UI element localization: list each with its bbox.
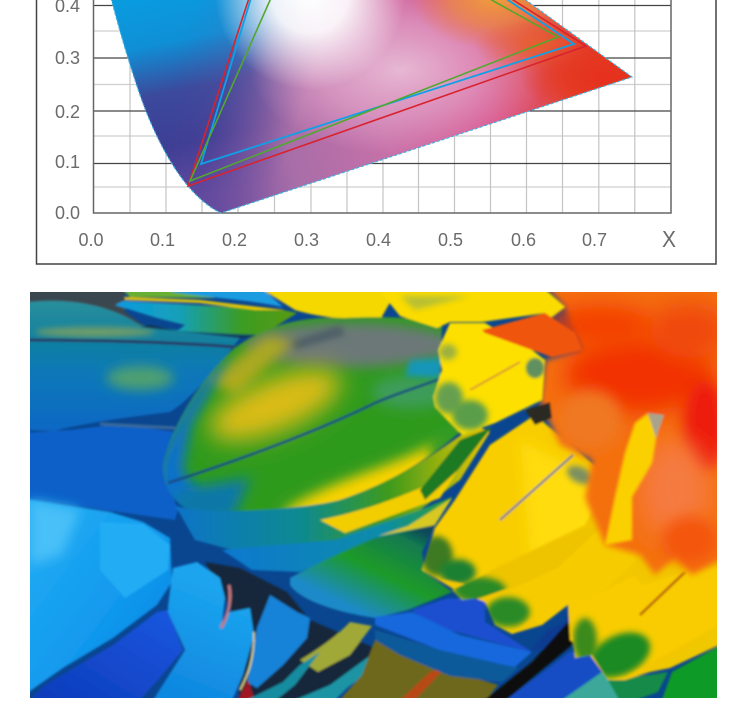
deep blue feather — [25, 610, 183, 705]
gamut outline — [111, 0, 632, 213]
chart frame — [36, 0, 716, 264]
pink quill — [221, 585, 230, 628]
x axis title: X — [662, 226, 676, 252]
upper yellow feather with green tips — [433, 323, 552, 435]
x axis labels: 0.1 — [150, 230, 175, 250]
yellow fan underlayer — [422, 415, 730, 680]
dark shadow under top feathers — [140, 325, 262, 338]
top green strip — [123, 292, 215, 300]
olive and teal lower feathers — [237, 622, 498, 705]
upper left teal-blue feather — [20, 301, 240, 431]
right side orange feathers — [536, 292, 717, 578]
photo base — [30, 292, 717, 698]
red colour triangle — [188, 0, 586, 186]
centre blue feather — [150, 562, 254, 705]
y axis labels: 0.2 — [55, 102, 80, 122]
top green feather — [115, 301, 297, 335]
x axis labels: 0.4 — [366, 230, 391, 250]
dark corner top-left — [30, 292, 144, 326]
red quill base — [237, 679, 255, 698]
teal and green bottom feathers — [555, 640, 730, 705]
blue stripe on top feather — [170, 292, 284, 310]
y axis labels: 0.1 — [55, 152, 80, 172]
yellow quill — [240, 632, 254, 690]
x axis labels: 0.3 — [294, 230, 319, 250]
dark gap below upper feather — [525, 402, 552, 425]
orange feather over yellow — [482, 313, 582, 357]
green tint on top yellow feather — [400, 296, 470, 310]
yellow lower right feather — [650, 639, 717, 674]
y axis labels: 0.3 — [55, 48, 80, 68]
dark green shadow between feathers — [420, 427, 492, 500]
light blue lower left feathers — [20, 498, 172, 698]
panel: CIE chromaticity chart — [36, 0, 716, 264]
colour gamut area — [112, 0, 632, 213]
fan feather 2 — [450, 572, 510, 602]
lower left blue feather — [20, 424, 178, 520]
yellow stripe feather within orange — [605, 413, 657, 545]
y axis labels: 0.0 — [55, 203, 80, 223]
x axis labels — [78, 230, 607, 250]
dark gap in the lower centre — [205, 562, 375, 705]
x axis labels: 0.0 — [78, 230, 104, 250]
black feather — [486, 622, 574, 698]
blue feather with black quill — [506, 650, 604, 698]
x axis labels: 0.7 — [582, 230, 607, 250]
green colour triangle — [190, 0, 558, 181]
top yellow feather — [262, 292, 391, 320]
blue colour triangle — [201, 0, 574, 164]
fan feather 4 — [570, 571, 686, 682]
layered feathers under the large feather — [175, 425, 490, 618]
fan feather 3 — [484, 592, 534, 635]
grey patch beside yellow stripe — [648, 413, 664, 438]
x axis labels: 0.5 — [438, 230, 463, 250]
royal blue lower feathers — [375, 598, 572, 682]
photo: macaw feathers — [30, 292, 717, 698]
quill stripes — [100, 424, 175, 428]
green lower feather — [290, 525, 452, 618]
blue feather right of centre — [247, 595, 310, 688]
x axis labels: 0.6 — [511, 230, 536, 250]
thin yellow band — [125, 297, 285, 310]
y axis labels — [55, 0, 80, 223]
large green and yellow feather — [160, 317, 470, 520]
x axis labels: 0.2 — [222, 230, 247, 250]
fan feather 1 — [421, 418, 592, 586]
chart grid — [94, 0, 671, 213]
upper top yellow feathers — [388, 292, 566, 330]
